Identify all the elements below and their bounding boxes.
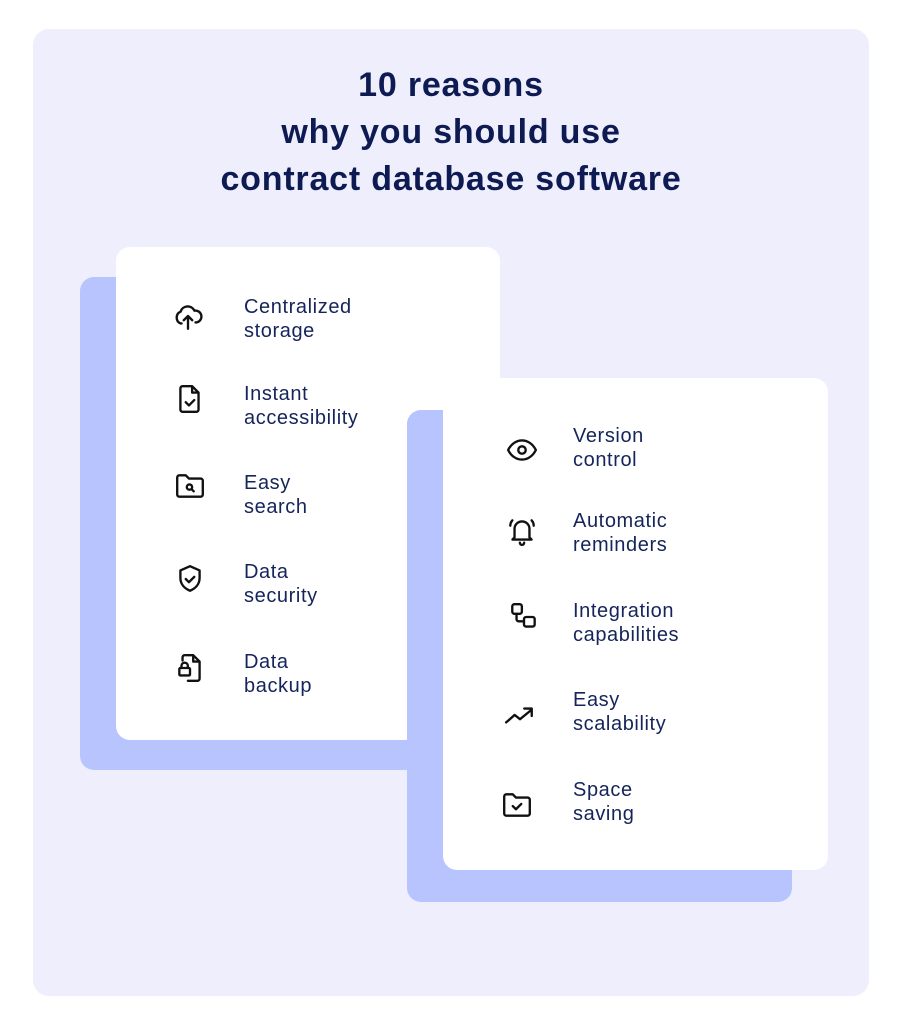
title (220, 66, 682, 198)
icon: cloud upload (176, 305, 203, 330)
icon: folder check (503, 793, 531, 817)
text: Space saving (573, 779, 634, 825)
text: Data backup: backup (244, 675, 312, 697)
icon: integration (511, 603, 536, 628)
icon: trend up (504, 707, 533, 724)
text: Integration capabilities (573, 600, 679, 646)
icon: file lock (178, 654, 201, 682)
text: Easy scalability: scalability (573, 713, 666, 735)
text: Easy scalability: Easy (573, 689, 620, 711)
text: Automatic reminders (573, 510, 667, 556)
text: Instant accessibility: accessibility (244, 407, 358, 429)
left card (116, 247, 500, 740)
text: Data security: Data (244, 561, 289, 583)
title: contract database software (220, 160, 682, 198)
icon: eye (506, 439, 537, 461)
text: Easy search: Easy (244, 472, 291, 494)
icon: folder search (176, 474, 204, 498)
text: Version control: control (573, 449, 637, 471)
text: Integration capabilities: capabilities (573, 624, 679, 646)
text: Data security (244, 561, 318, 607)
left card shadow (80, 277, 460, 770)
title: 10 reasons (358, 66, 544, 104)
text: Version control (573, 425, 644, 471)
text: Centralized storage (244, 296, 352, 342)
text: Version control: Version (573, 425, 644, 447)
title: why you should use (281, 113, 621, 151)
text: Space saving: saving (573, 803, 634, 825)
text: Space saving: Space (573, 779, 633, 801)
text: Data security: security (244, 585, 318, 607)
text: Data backup (244, 651, 312, 697)
text: Data backup: Data (244, 651, 289, 673)
text: Automatic reminders: reminders (573, 534, 667, 556)
text: Automatic reminders: Automatic (573, 510, 667, 532)
right card (443, 378, 828, 870)
text: Centralized storage: Centralized (244, 296, 352, 318)
text: Easy search: search (244, 496, 308, 518)
text: Easy scalability (573, 689, 666, 735)
right card shadow (407, 410, 792, 902)
text: Integration capabilities: Integration (573, 600, 674, 622)
text: Instant accessibility (244, 383, 358, 429)
icon: shield check (179, 565, 201, 592)
text: Instant accessibility: Instant (244, 383, 308, 405)
icon: file check (179, 385, 200, 413)
text: Centralized storage: storage (244, 320, 315, 342)
icon: bell (509, 519, 535, 546)
text: Easy search (244, 472, 308, 518)
